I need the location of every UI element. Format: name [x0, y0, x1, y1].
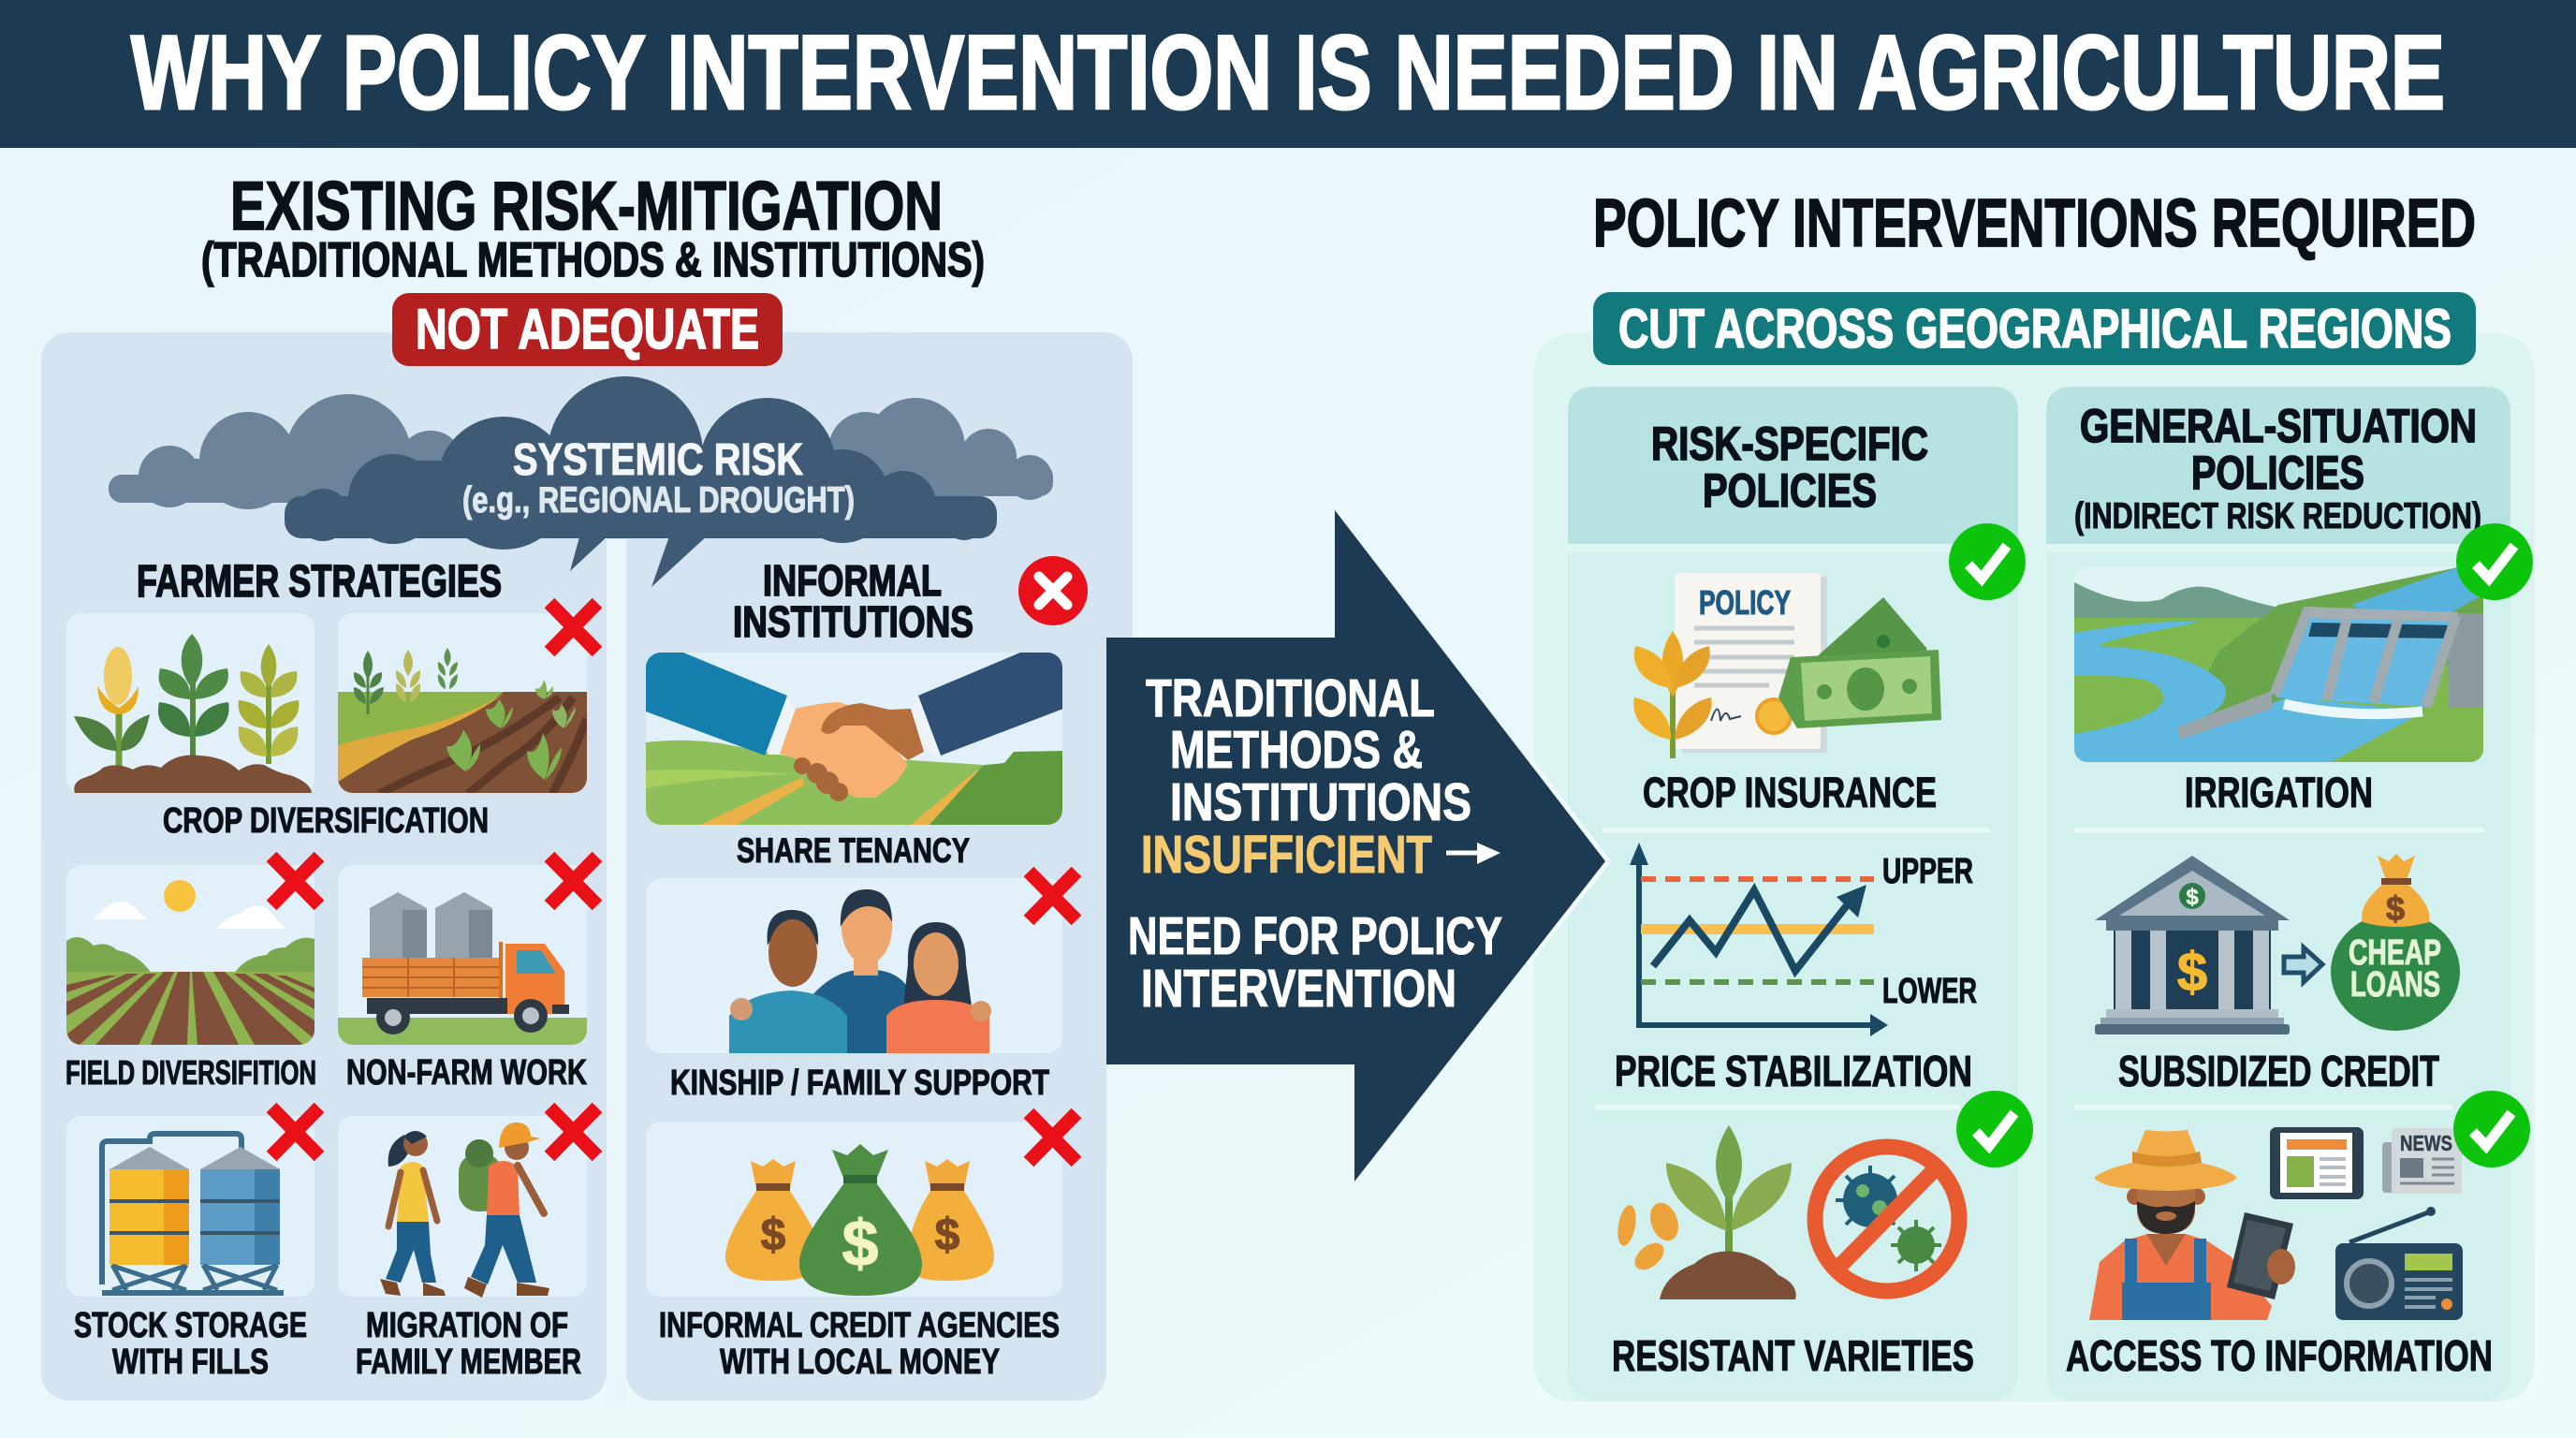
clouds: systemic risk: (e.g., REGIONAL DROUGHT) [462, 480, 855, 521]
label: stock storage with fills: STOCK STORAGE [74, 1306, 307, 1345]
green check badges [1949, 523, 2533, 1167]
right bag: $ [935, 1211, 960, 1260]
label: crop diversification: CROP DIVERSIFICATION [163, 801, 489, 841]
central arrow [1106, 510, 1605, 1181]
central arrow: TRADITIONAL [1146, 668, 1435, 728]
label: migration of family member [356, 1306, 581, 1382]
chassis [367, 998, 507, 1014]
silo legs [112, 1265, 277, 1290]
central arrow: NEED FOR POLICY [1128, 906, 1502, 966]
newspaper [2382, 1142, 2397, 1193]
cab [499, 942, 503, 998]
heading: existing risk-mitigation [201, 169, 985, 287]
label: migration of family member: FAMILY MEMBER [356, 1343, 581, 1382]
right person [903, 922, 972, 1006]
central arrow: INSUFFICIENT [1141, 825, 1432, 885]
label: non-farm work: NON-FARM WORK [346, 1053, 587, 1093]
icon: red circle cross [1018, 556, 1088, 625]
tile: family [646, 878, 1062, 1053]
central arrow: INSTITUTIONS [1170, 772, 1471, 832]
label: price stabilization: PRICE STABILIZATION [1615, 1047, 1972, 1095]
central arrow: INTERVENTION [1141, 959, 1456, 1019]
icon: bank to cheap loans: $ [2177, 942, 2207, 1003]
tile: crop plants [66, 613, 315, 793]
corn [74, 647, 150, 768]
icon: crop insurance [1633, 573, 1941, 758]
truck bed [362, 958, 500, 997]
yellow-green plant [239, 644, 299, 764]
column heading: risk-specific policies: RISK-SPECIFIC [1651, 418, 1928, 470]
column heading: risk-specific policies: POLICIES [1703, 464, 1877, 517]
yellow silo [110, 1147, 189, 1169]
front cloud with speech tails [285, 376, 997, 587]
back cloud right [828, 398, 1053, 500]
small plants [354, 648, 576, 780]
seeds [1615, 1204, 1639, 1247]
icon: bank to cheap loans: LOANS [2350, 965, 2440, 1005]
panel: policy interventions background [1534, 333, 2535, 1401]
river [2074, 622, 2424, 762]
label: informal credit agencies: WITH LOCAL MONEY [720, 1343, 1000, 1382]
right bag [908, 1159, 994, 1281]
icon: access to information: NEWS [2400, 1131, 2452, 1155]
woman [380, 1131, 446, 1296]
icon: bank to cheap loans: $ [2386, 889, 2405, 928]
tile: storage silos [66, 1116, 315, 1297]
label: stock storage with fills: WITH FILLS [112, 1343, 269, 1382]
middle bag [799, 1144, 922, 1296]
label: migration of family member: MIGRATION OF [366, 1306, 568, 1345]
label: field diversifition: FIELD DIVERSIFITION [66, 1053, 316, 1092]
icon: crop insurance: POLICY [1699, 583, 1791, 622]
tile: plowed field with crops [338, 613, 587, 795]
man with backpack [459, 1123, 549, 1298]
heading: informal institutions: INSTITUTIONS [733, 597, 973, 646]
icon: resistant varieties [1615, 1125, 1959, 1299]
cuffs [768, 697, 796, 755]
label: informal credit agencies [659, 1306, 1060, 1382]
middle bag: $ [842, 1207, 878, 1280]
upper channel [2351, 567, 2479, 612]
column heading: general-situation policies: POLICIES [2191, 447, 2364, 499]
label: irrigation: IRRIGATION [2185, 769, 2373, 816]
icon: access to information [2089, 1127, 2463, 1320]
middle person [812, 970, 906, 1053]
tile: truck and silos [338, 865, 587, 1046]
label: resistant varieties: RESISTANT VARIETIES [1612, 1331, 1974, 1380]
arrow [2284, 947, 2322, 982]
panel: existing methods background [41, 332, 1133, 1405]
radio [2349, 1211, 2431, 1242]
heading: informal institutions [733, 556, 973, 646]
icon: irrigation dam [2074, 567, 2483, 763]
icon: bank to cheap loans [2095, 854, 2460, 1034]
icon: bank to cheap loans: $ [2186, 885, 2199, 910]
label: subsidized credit: SUBSIDIZED CREDIT [2118, 1047, 2439, 1095]
heading: farmer strategies: FARMER STRATEGIES [137, 557, 502, 607]
column heading: risk-specific policies [1651, 418, 1928, 517]
viruses in prohibition sign [1843, 1173, 1897, 1227]
farmer [2089, 1130, 2272, 1320]
label: stock storage with fills [74, 1306, 307, 1382]
tablet [2270, 1127, 2364, 1199]
label: informal credit agencies: INFORMAL CREDIT AGENCIES [659, 1306, 1060, 1345]
left bag [725, 1159, 822, 1281]
chart: price stabilization [1630, 843, 1977, 1036]
heading: existing risk-mitigation: EXISTING RISK-MITIGATION [230, 169, 943, 244]
silos [370, 892, 427, 959]
phone [2227, 1212, 2293, 1299]
chart: price stabilization: UPPER [1882, 852, 1973, 891]
wheat [1670, 637, 1676, 758]
tile: money bags [646, 1122, 1062, 1297]
chart: price stabilization: LOWER [1882, 972, 1977, 1011]
left person [768, 910, 818, 946]
green plant [158, 634, 229, 756]
badge: not adequate [392, 293, 783, 366]
sprout [1725, 1175, 1733, 1264]
loan bag [2331, 913, 2460, 1031]
label: share tenancy: SHARE TENANCY [737, 831, 970, 870]
heading: informal institutions: INFORMAL [763, 556, 942, 605]
badge: not adequate: NOT ADEQUATE [416, 298, 759, 360]
clasped hands [780, 702, 908, 798]
heading: existing risk-mitigation: (TRADITIONAL METHODS & INSTITUTIONS) [201, 233, 985, 287]
back cloud left [109, 394, 463, 521]
banknotes [1802, 597, 1933, 688]
tile: migrating people [338, 1116, 587, 1298]
label: kinship family support: KINSHIP / FAMILY SUPPORT [670, 1064, 1049, 1103]
blue silo [200, 1147, 280, 1169]
central arrow: METHODS & [1170, 720, 1423, 780]
dam [2276, 613, 2458, 707]
column heading: general-situation policies: GENERAL-SITUATION [2080, 400, 2477, 452]
red cross marks [271, 603, 1076, 1162]
systemic risk label: SYSTEMIC RISK [513, 435, 803, 485]
soil [74, 756, 312, 793]
label: crop insurance: CROP INSURANCE [1643, 769, 1937, 816]
icon: bank to cheap loans: CHEAP [2349, 933, 2441, 973]
policy document [1682, 577, 1827, 753]
tile: field landscape [66, 865, 315, 1047]
hill beside dam [2207, 567, 2483, 715]
clouds: systemic risk [109, 376, 1053, 587]
tile: handshake [646, 653, 1063, 825]
left bag: $ [761, 1211, 786, 1260]
column heading: general-situation policies [2074, 400, 2481, 536]
bank [2095, 856, 2290, 920]
dividers [1595, 830, 2484, 1108]
